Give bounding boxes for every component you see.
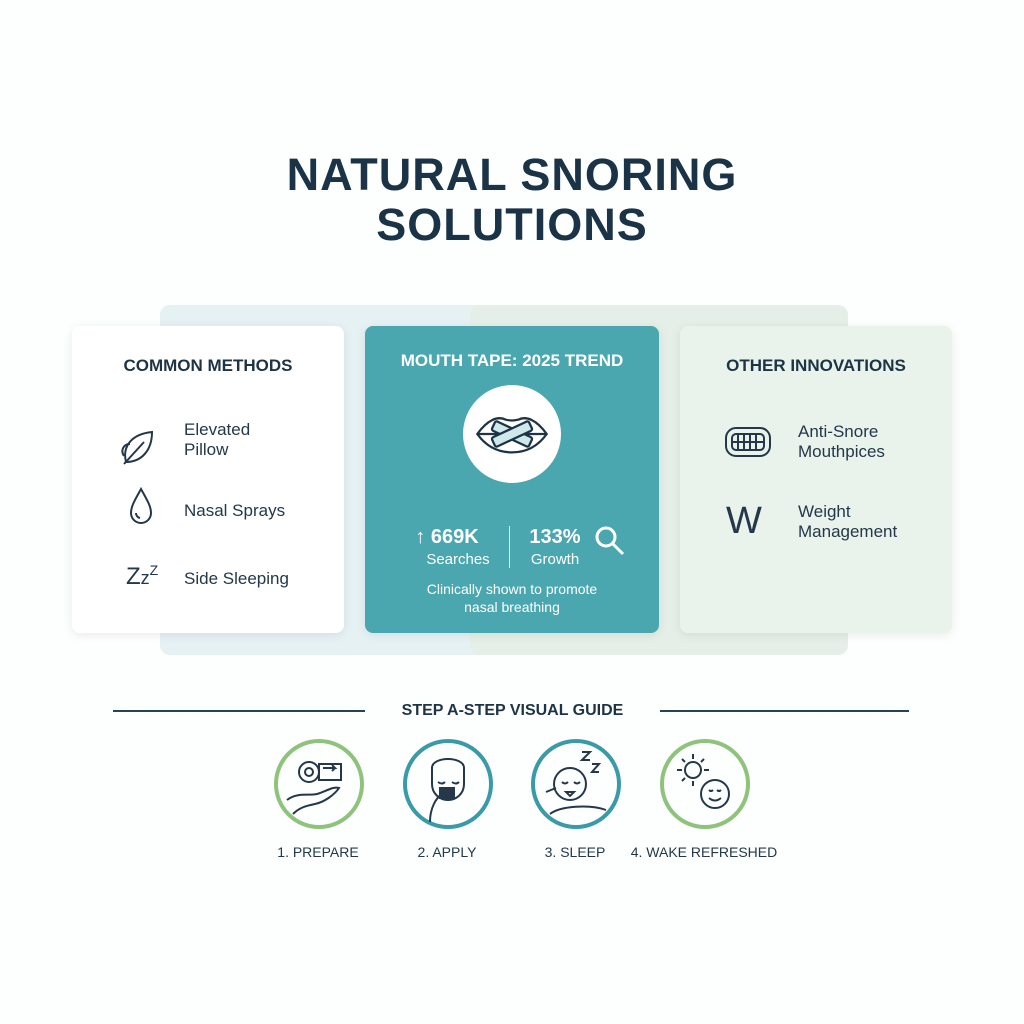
step 1: prepare bbox=[274, 739, 364, 860]
text: elevated pillow bbox=[184, 420, 250, 459]
stat: growth: 133% bbox=[529, 526, 581, 548]
title bbox=[287, 149, 737, 250]
text: weight management: Management bbox=[798, 522, 897, 541]
step 4: wake refreshed: 4. WAKE REFRESHED bbox=[631, 844, 777, 860]
title: NATURAL SNORING bbox=[287, 149, 737, 200]
text: clinically shown: nasal breathing bbox=[464, 599, 560, 615]
icon: mouthpiece bbox=[725, 427, 771, 457]
text: anti-snore: Mouthpices bbox=[798, 442, 885, 461]
text: anti-snore bbox=[798, 422, 885, 461]
step 3: sleep: 3. SLEEP bbox=[545, 844, 605, 860]
panel: other innovations bbox=[680, 326, 952, 633]
text: weight management: Weight bbox=[798, 502, 851, 521]
icon: magnifier bbox=[596, 526, 624, 555]
stat: searches: ↑ 669K bbox=[415, 526, 479, 548]
background panel: blue bbox=[160, 305, 540, 655]
panel: common methods bbox=[72, 326, 344, 633]
title: SOLUTIONS bbox=[376, 199, 648, 250]
step 1: prepare: 1. PREPARE bbox=[277, 844, 359, 860]
stat: searches: Searches bbox=[426, 551, 490, 568]
divider heading: STEP A-STEP VISUAL GUIDE bbox=[402, 702, 623, 719]
heading: mouth tape: MOUTH TAPE: 2025 TREND bbox=[401, 351, 623, 370]
stat: searches bbox=[415, 526, 490, 568]
icon: taped lips bbox=[463, 385, 561, 483]
step 2: apply bbox=[403, 739, 493, 860]
heading: common methods: COMMON METHODS bbox=[123, 356, 293, 375]
icon: leaf bbox=[121, 430, 153, 465]
text: nasal sprays: Nasal Sprays bbox=[184, 501, 285, 520]
text: elevated pillow: Pillow bbox=[184, 440, 228, 459]
icon: weight W: W bbox=[726, 500, 758, 542]
heading: other innovations: OTHER INNOVATIONS bbox=[726, 356, 906, 375]
stat: growth: Growth bbox=[531, 551, 579, 568]
text: anti-snore: Anti-Snore bbox=[798, 422, 878, 441]
text: clinically shown bbox=[427, 581, 597, 615]
step 3: sleep bbox=[531, 739, 621, 860]
background panel: green bbox=[470, 305, 848, 655]
step 2: apply: 2. APPLY bbox=[418, 844, 476, 860]
icon: drop bbox=[130, 487, 152, 524]
text: clinically shown: Clinically shown to promote bbox=[427, 581, 597, 597]
text: elevated pillow: Elevated bbox=[184, 420, 250, 439]
icon: zzz: ZzZ bbox=[126, 562, 158, 590]
text: weight management bbox=[798, 502, 898, 541]
panel: mouth tape bbox=[365, 326, 659, 633]
step 4: wake refreshed bbox=[631, 739, 777, 860]
text: side sleeping: Side Sleeping bbox=[184, 569, 289, 588]
stat: growth bbox=[509, 526, 600, 568]
